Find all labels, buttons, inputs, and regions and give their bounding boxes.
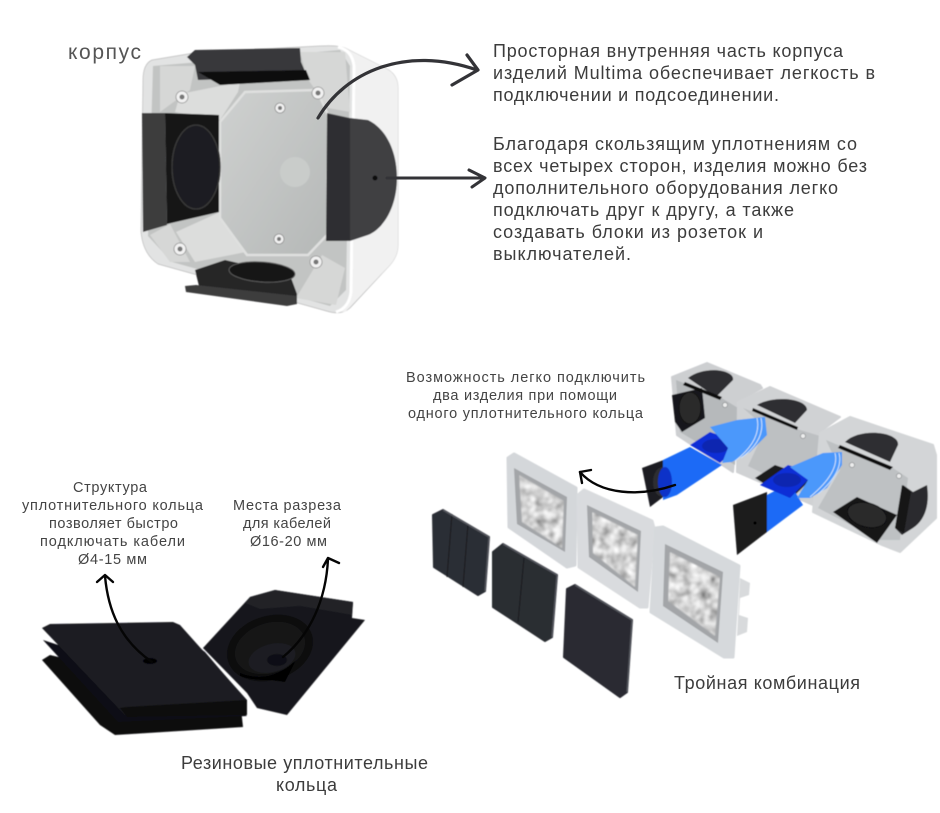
text block: sliding seals <box>493 134 867 264</box>
text block: sliding seals: всех четырех сторон, изделия можно без <box>493 156 867 176</box>
caption: rubber seal rings: Резиновые уплотнительные <box>181 753 428 773</box>
double key <box>493 544 557 641</box>
switch keys <box>433 510 632 697</box>
arrow: ring structure <box>97 575 152 662</box>
caption: rubber seal rings <box>181 753 428 795</box>
faceplate 3 <box>651 527 750 657</box>
box 3 <box>813 417 936 552</box>
caption: ring structure <box>22 480 204 568</box>
text block: sliding seals: создавать блоки из розеток и <box>493 222 763 242</box>
lower detached seal <box>733 492 767 555</box>
caption: ring structure: Структура <box>73 480 148 496</box>
faceplate 1 <box>508 454 576 567</box>
single key <box>564 585 632 697</box>
housing floor <box>220 90 328 255</box>
bottom seal <box>195 260 297 303</box>
arrow: to interior text <box>318 55 478 118</box>
caption: ring structure: Ø4-15 мм <box>78 552 147 568</box>
caption: cable cut points: Ø16-20 мм <box>250 534 327 550</box>
blue connection: lower <box>760 452 842 532</box>
faceplate 2 <box>578 490 654 607</box>
caption: cable cut points: Места разреза <box>233 498 342 514</box>
arrow: to seals text <box>387 170 485 187</box>
right seal <box>327 113 397 241</box>
caption: rubber seal rings: кольца <box>276 775 338 795</box>
blue connection: upper <box>658 417 767 500</box>
caption: connect two products: Возможность легко подключить <box>406 370 645 386</box>
caption: ring structure: уплотнительного кольца <box>22 498 204 514</box>
text block: sliding seals: подключать друг к другу, а также <box>493 200 794 220</box>
caption: connect two products: одного уплотнительного кольца <box>408 406 644 422</box>
illustration: rubber rings <box>42 590 365 735</box>
caption: connect two products <box>406 370 645 422</box>
box 1 <box>672 363 762 472</box>
left detached seal <box>642 455 677 507</box>
text block: interior: изделий Multima обеспечивает легкость в <box>493 63 875 83</box>
arrow: cable cut <box>283 558 339 657</box>
label: корпус: корпус <box>68 41 141 64</box>
top seal <box>187 48 307 80</box>
text block: sliding seals: выключателей. <box>493 244 631 264</box>
caption: cable cut points: для кабелей <box>243 516 331 532</box>
faceplates <box>508 454 750 657</box>
left ring <box>42 622 247 735</box>
caption: cable cut points <box>233 498 342 550</box>
text block: interior <box>493 41 875 105</box>
caption: connect two products: два изделия при помощи <box>433 388 617 404</box>
text block: interior: подключении и подсоединении. <box>493 85 779 105</box>
arrow: seal to caption <box>580 470 675 492</box>
housing outer shell <box>141 46 398 313</box>
caption: ring structure: позволяет быстро <box>49 516 178 532</box>
illustration: three connected boxes <box>642 363 936 555</box>
text block: sliding seals: Благодаря скользящим уплотнениям со <box>493 134 857 154</box>
screw bosses <box>722 402 902 478</box>
housing inner walls <box>148 50 350 306</box>
right ring <box>203 590 365 715</box>
triple key <box>433 510 489 595</box>
text block: sliding seals: дополнительного оборудования легко <box>493 178 838 198</box>
illustration: housing box <box>141 46 398 313</box>
text block: interior: Просторная внутренняя часть корпуса <box>493 41 844 61</box>
caption: ring structure: подключать кабели <box>40 534 185 550</box>
box 2 <box>737 387 840 505</box>
screw posts <box>174 87 324 268</box>
caption: triple combination: Тройная комбинация <box>674 673 860 693</box>
left seal with cavity <box>142 113 167 232</box>
